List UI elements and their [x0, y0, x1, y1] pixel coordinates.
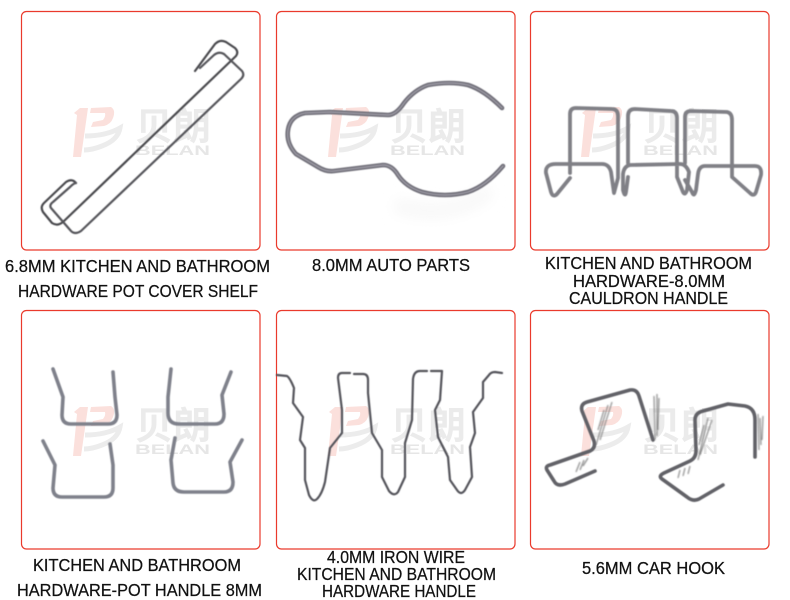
three handles: [546, 108, 761, 196]
watermark logo: BELAN: [390, 441, 465, 457]
watermark logo: 贝朗: [643, 107, 719, 149]
caption: cauldron handle: CAULDRON HANDLE: [569, 288, 728, 308]
watermark logo: 贝朗: [135, 107, 211, 149]
caption: cauldron handle: KITCHEN AND BATHROOM: [545, 253, 752, 273]
watermark logo: [73, 406, 211, 457]
panel: auto parts: [276, 12, 515, 250]
caption: cauldron handle: HARDWARE-8.0MM: [573, 271, 725, 291]
watermark logo: BELAN: [135, 142, 210, 158]
caption: car hook: 5.6MM CAR HOOK: [582, 558, 725, 578]
caption: iron wire handle: 4.0MM IRON WIRE: [327, 547, 465, 567]
panel: pot handle: [22, 310, 260, 549]
watermark logo: [328, 107, 466, 158]
panel: iron wire handle: [276, 310, 515, 549]
watermark logo: 贝朗: [390, 107, 466, 149]
wavy wire: [277, 371, 502, 500]
motion streaks: [576, 394, 763, 478]
caption: pot handle: KITCHEN AND BATHROOM: [33, 555, 241, 575]
caption: pot cover shelf: 6.8MM KITCHEN AND BATHROOM: [5, 256, 270, 276]
watermark logo: 贝朗: [390, 406, 466, 448]
caption: cauldron handle: [545, 253, 752, 308]
caption: iron wire handle: [297, 547, 496, 600]
watermark logo: BELAN: [135, 441, 210, 457]
watermark logo: 贝朗: [643, 406, 719, 448]
caption: auto parts: 8.0MM AUTO PARTS: [312, 255, 470, 275]
caption: pot cover shelf: [5, 256, 270, 301]
watermark logo: [73, 107, 211, 158]
caption: pot handle: [17, 555, 262, 600]
soft shadow: [395, 190, 490, 211]
watermark logo: BELAN: [643, 441, 718, 457]
watermark logo: BELAN: [390, 142, 465, 158]
panel: cauldron handle: [530, 12, 769, 250]
wire clip: [288, 83, 503, 195]
watermark logo: [581, 406, 719, 457]
four handles: [43, 369, 242, 497]
panel: pot cover shelf: [22, 12, 260, 250]
watermark logo: [328, 406, 466, 457]
two hooks: [546, 390, 755, 500]
panel: car hook: [530, 310, 769, 549]
caption: iron wire handle: KITCHEN AND BATHROOM: [297, 564, 496, 584]
caption: pot cover shelf: HARDWARE POT COVER SHELF: [18, 281, 258, 301]
watermark logo: [581, 107, 719, 158]
caption: pot handle: HARDWARE-POT HANDLE 8MM: [17, 580, 262, 600]
wire shelf: [42, 41, 243, 233]
watermark logo: 贝朗: [135, 406, 211, 448]
watermark logo: BELAN: [643, 142, 718, 158]
